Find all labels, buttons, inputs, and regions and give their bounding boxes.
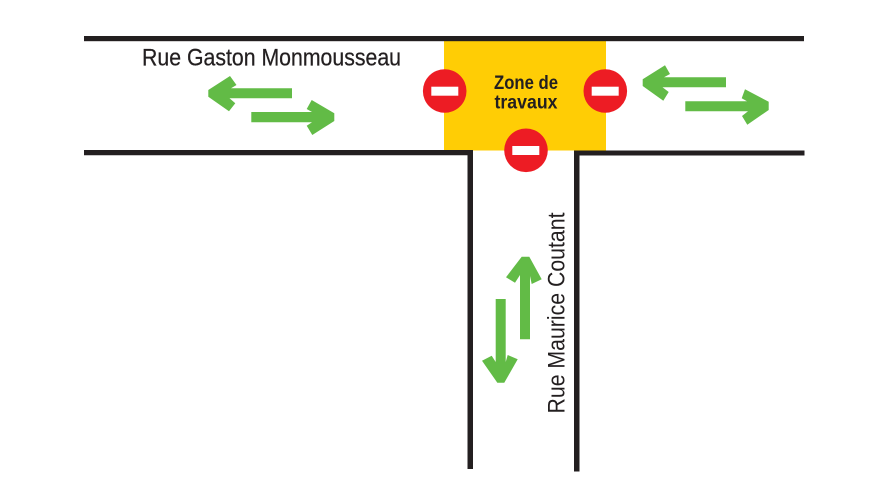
label: Rue Gaston Monmousseau: Rue Gaston Monmousseau (142, 44, 401, 72)
icon: no entry sign bottom (504, 128, 548, 172)
icon: no entry sign right (584, 69, 627, 113)
label: Zone de travaux (494, 73, 558, 113)
icon: no entry sign left (423, 69, 467, 113)
label: Zone de travaux: Zone de (494, 73, 558, 94)
label: Rue Maurice Coutant: Rue Maurice Coutant (544, 212, 570, 414)
label: Zone de travaux: travaux (494, 92, 558, 113)
arrows: two-way traffic left street (208, 76, 334, 135)
road outlines (84, 36, 804, 472)
work zone area (444, 41, 606, 150)
arrows: two-way traffic lower street (482, 257, 542, 383)
arrows: two-way traffic right street (643, 65, 769, 125)
